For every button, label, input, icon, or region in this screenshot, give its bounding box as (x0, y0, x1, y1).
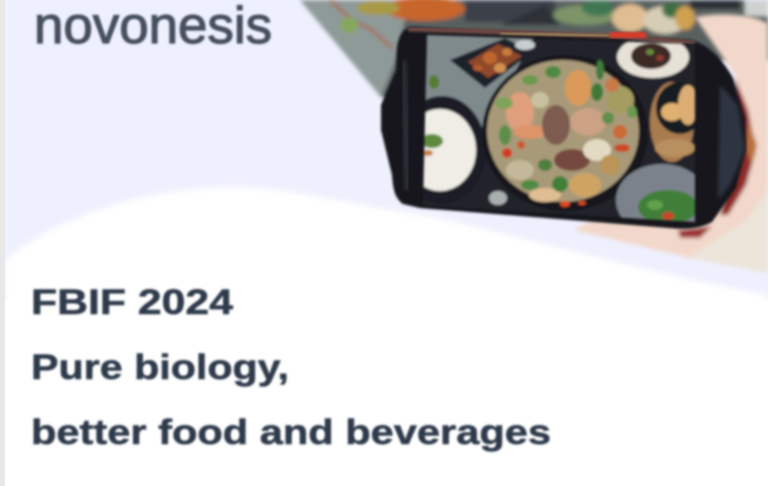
main plate (482, 55, 648, 211)
small bowl top (617, 36, 689, 78)
bowl bottom right with greens (614, 162, 697, 224)
dish right with shrimp (650, 82, 694, 162)
photo background: food table (300, 0, 768, 100)
white body below wave (5, 300, 768, 486)
phone (381, 27, 746, 236)
phone body (381, 27, 746, 229)
hand holding phone (574, 14, 768, 273)
white wave with soft shadow (5, 187, 768, 486)
side dish top (450, 38, 532, 88)
left gray strip (0, 0, 5, 486)
heading: better food and beverages: better food and beverages (31, 413, 551, 452)
phone screen photo (422, 34, 697, 224)
plate food details (506, 92, 534, 132)
heading: FBIF 2024: FBIF 2024 (31, 283, 234, 322)
phone side reflection (718, 85, 745, 200)
heading: Pure biology: Pure biology, (31, 348, 289, 387)
rice bowl (424, 94, 484, 132)
phone top edge (408, 29, 695, 43)
